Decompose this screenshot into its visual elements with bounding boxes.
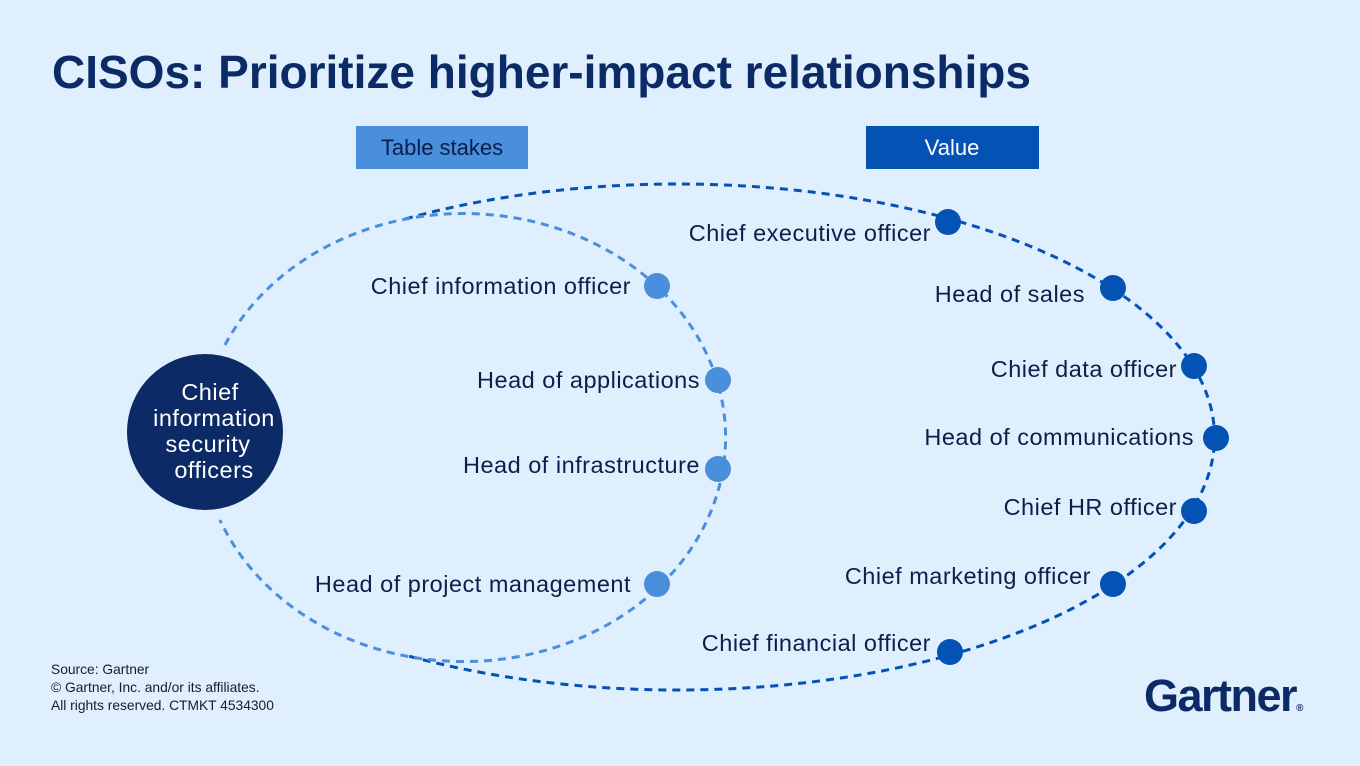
value roles: Head of sales — [935, 281, 1085, 307]
value roles — [689, 209, 1229, 665]
CISO circle: information — [153, 405, 275, 431]
table stakes roles: Head of applications — [477, 367, 700, 393]
label box: table stakes: Table stakes — [381, 135, 503, 160]
table stakes roles: Head of infrastructure — [463, 452, 700, 478]
value roles: Chief financial officer — [702, 630, 931, 656]
logo: Gartner® — [1144, 670, 1304, 721]
value ellipse — [405, 184, 1215, 690]
table stakes roles — [315, 273, 731, 597]
CISO circle — [127, 354, 283, 510]
value roles: Head of communications — [924, 424, 1194, 450]
table stakes roles: Chief information officer — [371, 273, 631, 299]
source text: All rights reserved. CTMKT 4534300 — [51, 698, 274, 713]
table stakes roles: Head of project management — [315, 571, 631, 597]
label box: value — [866, 126, 1039, 169]
CISO circle: Chief — [181, 379, 239, 405]
CISO circle: officers — [174, 457, 254, 483]
value roles: Chief marketing officer — [845, 563, 1091, 589]
source text: © Gartner, Inc. and/or its affiliates. — [51, 680, 260, 695]
value roles: Chief executive officer — [689, 220, 931, 246]
label box: value: Value — [925, 135, 979, 160]
value roles: Chief HR officer — [1004, 494, 1177, 520]
value roles: Chief data officer — [991, 356, 1177, 382]
source text: Source: Gartner — [51, 662, 150, 677]
table stakes ellipse — [220, 214, 726, 662]
CISO circle: security — [166, 431, 250, 457]
title: CISOs: Prioritize higher-impact relationships — [52, 46, 1031, 98]
label box: table stakes — [356, 126, 528, 169]
